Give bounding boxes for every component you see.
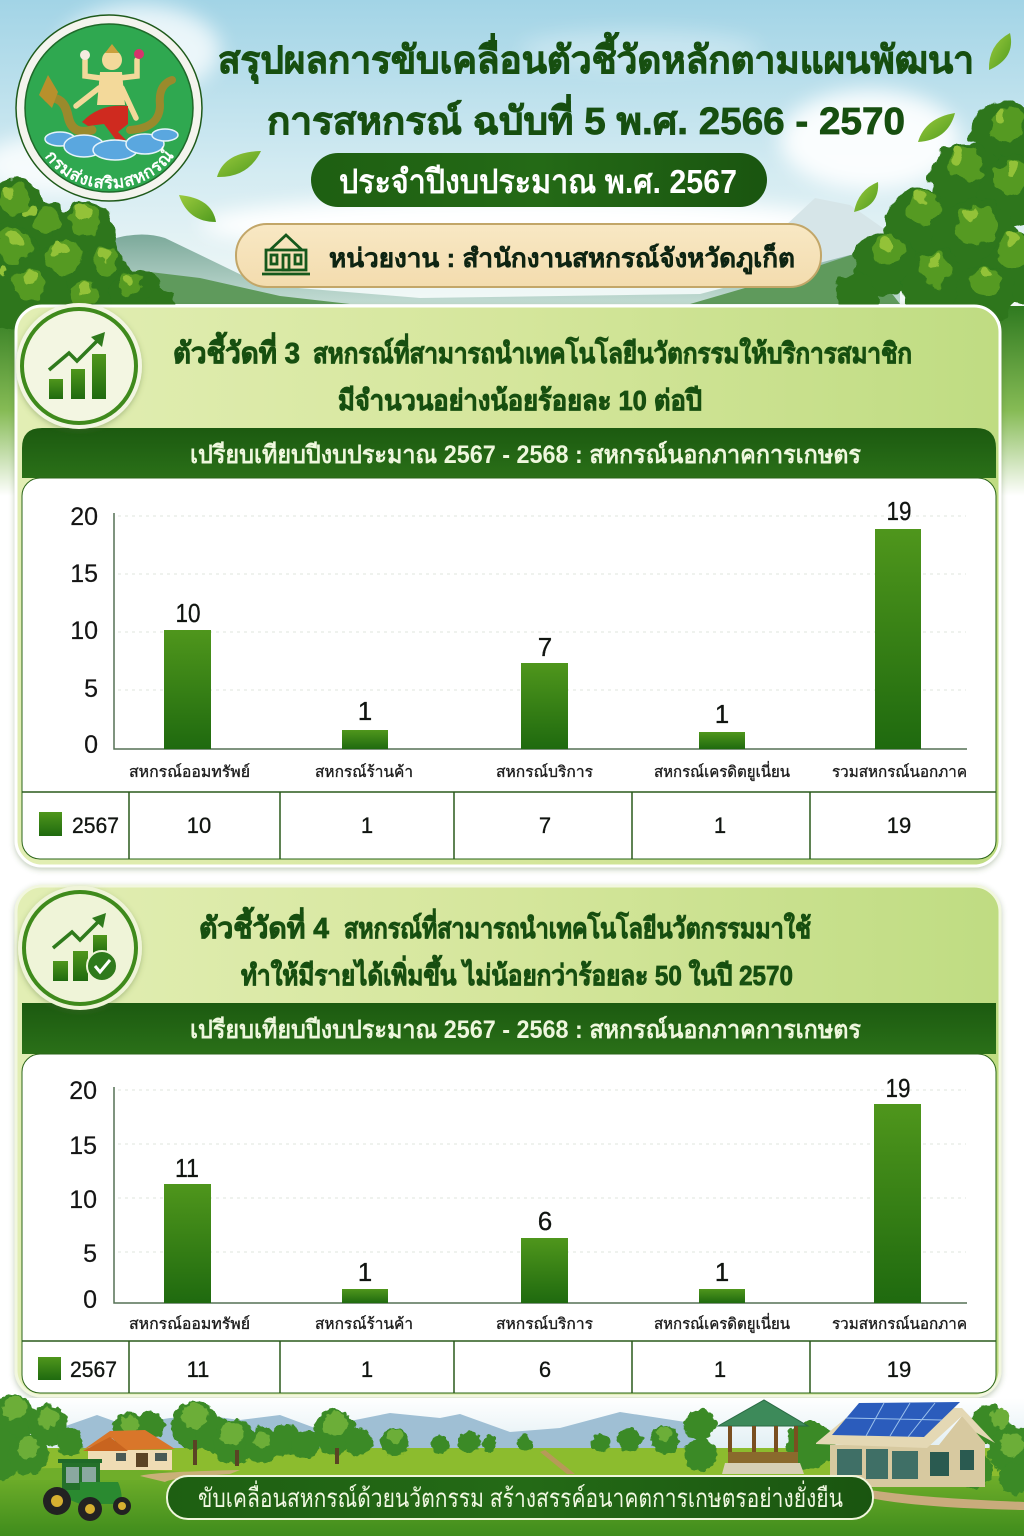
bar chart: indicator 4: 19 bbox=[886, 1073, 910, 1103]
icon: growth with check mark bbox=[18, 886, 142, 1010]
bar chart: indicator 4: 10 bbox=[69, 1186, 97, 1214]
heading: indicator 4: ทำให้มีรายได้เพิ่มขึ้น ไม่น้อยกว่าร้อยละ 50 ในปี 2570 bbox=[241, 954, 793, 991]
dark band: indicator 3 comparison heading bbox=[22, 428, 996, 478]
data table: indicator 4: 19 bbox=[887, 1357, 911, 1382]
bar chart: indicator 4 bbox=[69, 1073, 967, 1334]
fiscal year pill bbox=[311, 153, 767, 207]
bar chart: indicator 3: สหกรณ์ร้านค้า bbox=[315, 763, 413, 781]
bar chart: indicator 3: 1 bbox=[358, 696, 372, 726]
heading: indicator 4: ตัวชี้วัดที่ 4 bbox=[199, 906, 329, 945]
bar chart: indicator 4: สหกรณ์ร้านค้า bbox=[315, 1315, 413, 1333]
footer slogan pill bbox=[167, 1476, 873, 1519]
heading: indicator 3: ตัวชี้วัดที่ 3 bbox=[173, 331, 300, 370]
bar chart: indicator 3: สหกรณ์เครดิตยูเนี่ยน bbox=[654, 761, 790, 782]
bar chart: indicator 3: 10 bbox=[70, 617, 98, 645]
bar chart: indicator 3: 5 bbox=[84, 675, 98, 703]
data table: indicator 4: 6 bbox=[539, 1357, 551, 1382]
dark band: indicator 3 comparison heading: เปรียบเทียบปีงบประมาณ 2567 - 2568 : สหกรณ์นอกภาคการเกษตร bbox=[190, 440, 862, 469]
agency pill bbox=[236, 224, 821, 287]
bar chart: indicator 3: 0 bbox=[84, 731, 98, 759]
data table: indicator 4 bbox=[22, 1341, 996, 1393]
heading: indicator 3: สหกรณ์ที่สามารถนำเทคโนโลยีนวัตกรรมให้บริการสมาชิก bbox=[313, 333, 912, 369]
tree line bbox=[0, 1394, 1024, 1494]
bar chart: indicator 4: สหกรณ์บริการ bbox=[496, 1315, 593, 1333]
bar chart: indicator 4: 1 bbox=[715, 1257, 729, 1287]
left tree cluster bbox=[0, 180, 174, 330]
data table: indicator 3: 1 bbox=[361, 813, 373, 838]
panel: indicator 3 bbox=[16, 303, 1000, 866]
bar chart: indicator 4: สหกรณ์ออมทรัพย์ bbox=[129, 1315, 250, 1333]
dark band: indicator 4 comparison heading: เปรียบเทียบปีงบประมาณ 2567 - 2568 : สหกรณ์นอกภาคการเกษตร bbox=[190, 1015, 862, 1044]
data table: indicator 3: 7 bbox=[539, 813, 551, 838]
bar chart: indicator 4: สหกรณ์เครดิตยูเนี่ยน bbox=[654, 1313, 790, 1334]
dark band: indicator 4 comparison heading bbox=[22, 1003, 996, 1054]
bar chart: indicator 4: 0 bbox=[83, 1286, 97, 1314]
heading: indicator 3 bbox=[173, 331, 912, 416]
bar chart: indicator 3: สหกรณ์บริการ bbox=[496, 763, 593, 781]
data table: indicator 4: 1 bbox=[361, 1357, 373, 1382]
bar chart: indicator 3: 19 bbox=[886, 496, 912, 526]
logo: serpents bbox=[48, 80, 172, 131]
agency pill: หน่วยงาน : สำนักงานสหกรณ์จังหวัดภูเก็ต bbox=[329, 242, 795, 275]
bar chart: indicator 3: สหกรณ์ออมทรัพย์ bbox=[129, 763, 250, 781]
data table: indicator 3: 2567 bbox=[72, 813, 119, 838]
bar chart: indicator 3 bbox=[70, 496, 967, 782]
heading: indicator 3: มีจำนวนอย่างน้อยร้อยละ 10 ต่อปี bbox=[338, 385, 702, 416]
heading: indicator 4: สหกรณ์ที่สามารถนำเทคโนโลยีนวัตกรรมมาใช้ bbox=[344, 908, 811, 944]
data table: indicator 3: 19 bbox=[887, 813, 911, 838]
logo: department name: กรมส่งเสริมสหกรณ์ bbox=[45, 146, 174, 189]
bar chart: indicator 4: รวมสหกรณ์นอกภาค bbox=[832, 1315, 967, 1333]
bar chart: indicator 3: 20 bbox=[70, 503, 98, 531]
orange roof house bbox=[83, 1430, 175, 1470]
title: การสหกรณ์ ฉบับที่ 5 พ.ศ. 2566 - 2570 bbox=[267, 94, 905, 143]
icon: government building bbox=[262, 235, 310, 274]
bar chart: indicator 4: 11 bbox=[175, 1153, 199, 1183]
bar chart: indicator 3: รวมสหกรณ์นอกภาค bbox=[832, 763, 967, 781]
bar chart: indicator 4: 5 bbox=[83, 1240, 97, 1268]
tractor bbox=[43, 1459, 131, 1521]
bar chart: indicator 3: 15 bbox=[70, 560, 98, 588]
logo: deity figure bbox=[76, 44, 144, 140]
bar chart: indicator 4: 15 bbox=[69, 1132, 97, 1160]
right tree cluster bbox=[833, 101, 1024, 325]
footer landscape bbox=[0, 1394, 1024, 1536]
data table: indicator 4: 2567 bbox=[70, 1357, 117, 1382]
solar panel house bbox=[816, 1402, 995, 1487]
floating leaves bbox=[179, 33, 1011, 222]
icon: rising bar chart bbox=[16, 303, 142, 429]
bar chart: indicator 4: 20 bbox=[69, 1077, 97, 1105]
bar chart: indicator 3: 10 bbox=[176, 598, 200, 628]
logo: clouds bbox=[45, 129, 178, 160]
title: สรุปผลการขับเคลื่อนตัวชี้วัดหลักตามแผนพัฒนา bbox=[218, 32, 974, 84]
bar chart: indicator 4: 6 bbox=[538, 1206, 552, 1236]
panel: indicator 4 bbox=[16, 886, 1000, 1396]
data table: indicator 3: 10 bbox=[187, 813, 211, 838]
bar chart: indicator 4: 1 bbox=[358, 1257, 372, 1287]
data table: indicator 4: 1 bbox=[714, 1357, 726, 1382]
fiscal year pill: ประจำปีงบประมาณ พ.ศ. 2567 bbox=[339, 163, 737, 200]
bar chart: indicator 3: 7 bbox=[538, 632, 552, 662]
gazebo bbox=[718, 1400, 808, 1474]
data table: indicator 3: 1 bbox=[714, 813, 726, 838]
data table: indicator 3 bbox=[22, 792, 996, 859]
department logo bbox=[15, 14, 203, 202]
heading: indicator 4 bbox=[199, 906, 811, 991]
data table: indicator 4: 11 bbox=[187, 1357, 209, 1382]
footer slogan pill: ขับเคลื่อนสหกรณ์ด้วยนวัตกรรม สร้างสรรค์อนาคตการเกษตรอย่างยั่งยืน bbox=[198, 1480, 843, 1513]
chart area indicator 4 bbox=[22, 1054, 996, 1393]
bar chart: indicator 3: 1 bbox=[715, 699, 729, 729]
chart area indicator 3 bbox=[22, 478, 996, 859]
title bbox=[218, 32, 974, 143]
